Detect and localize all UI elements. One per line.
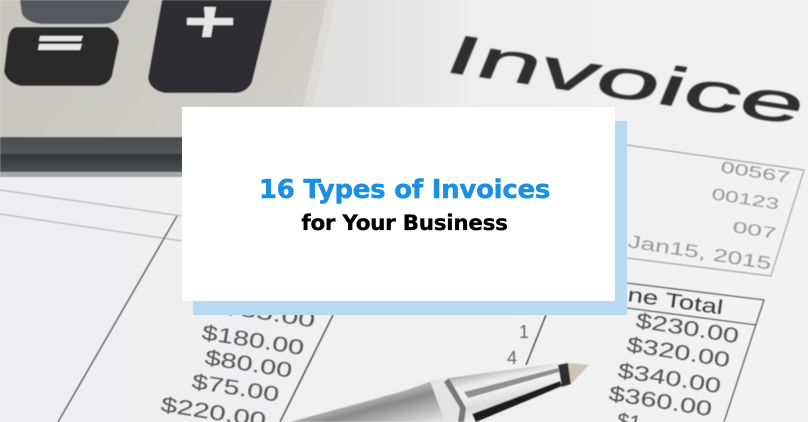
price column (159, 295, 333, 422)
price column: $80.00 (203, 346, 294, 383)
table lines (0, 190, 182, 422)
invoice number box: 00567 (719, 159, 791, 187)
key: top (20, 0, 130, 24)
invoice number box: 00123 (710, 186, 780, 214)
key: plus (148, 0, 272, 93)
line total column: ne Total (626, 284, 724, 319)
invoice number box: Jan15, 2015 (626, 231, 773, 274)
line total column: $340.00 (616, 359, 723, 398)
quantity column: 4 (507, 348, 517, 368)
quantity column: 1 (519, 322, 529, 342)
pen (290, 363, 589, 422)
key: equals (4, 27, 119, 86)
price column: $180.00 (200, 321, 306, 360)
line total column: $230.00 (634, 309, 741, 348)
price column: $75.00 (190, 370, 281, 407)
line total column: $360.00 (607, 382, 714, 421)
line total column (607, 283, 764, 422)
line total column: $320.00 (625, 333, 732, 372)
invoice number box: 007 (731, 219, 778, 243)
subtitle: for Your Business: for Your Business (301, 211, 508, 236)
invoice number box (626, 145, 804, 276)
title: 16 Types of Invoices: 16 Types of Invoices (259, 175, 550, 205)
title card: blue offset backing (193, 121, 627, 315)
quantity column (507, 315, 546, 368)
calculator (0, 0, 335, 177)
price column: $85.00 (221, 295, 317, 332)
printed word Invoice: Invoice (436, 23, 808, 135)
title card (182, 107, 615, 301)
